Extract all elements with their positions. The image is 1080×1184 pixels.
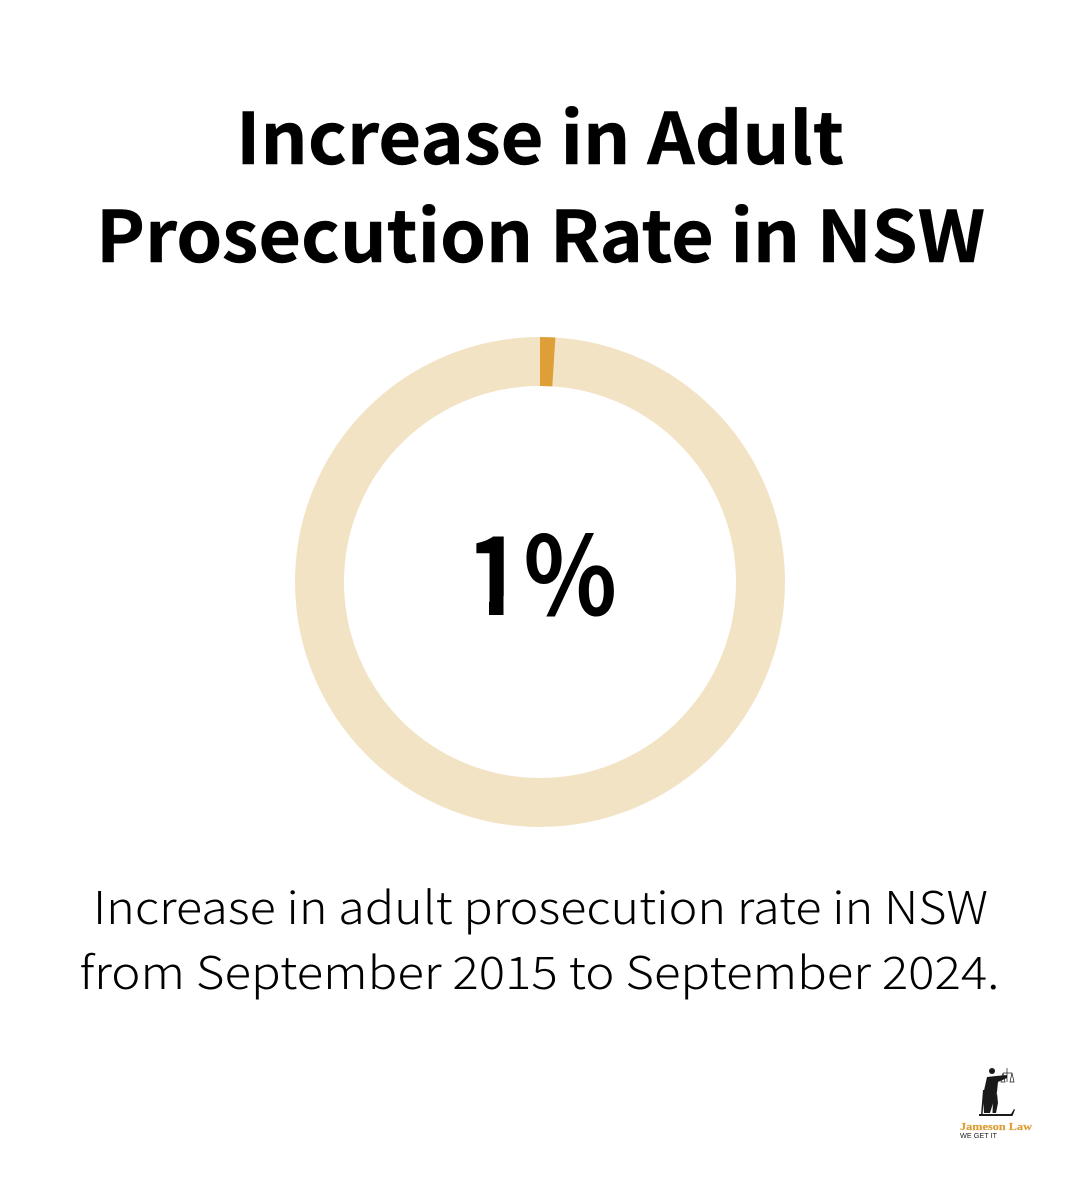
donut chart: 1% [320,337,760,802]
logo: Jameson Law [960,1068,1032,1140]
logo wordmark: Jameson Law [960,1122,1032,1133]
title: Prosecution Rate in NSW [96,181,985,283]
title: Increase in Adult [236,83,844,185]
donut track [320,362,760,802]
title [96,83,985,283]
donut highlighted segment [540,337,555,386]
description text: Increase in adult prosecution rate in NSW [93,872,988,937]
icon: scales [1001,1068,1014,1082]
description text [80,872,1000,1002]
logo tagline: WE GET IT [960,1133,998,1140]
description text: from September 2015 to September 2024. [80,937,1000,1002]
center value: 1% [466,490,617,647]
icon: lady justice [979,1068,1015,1116]
